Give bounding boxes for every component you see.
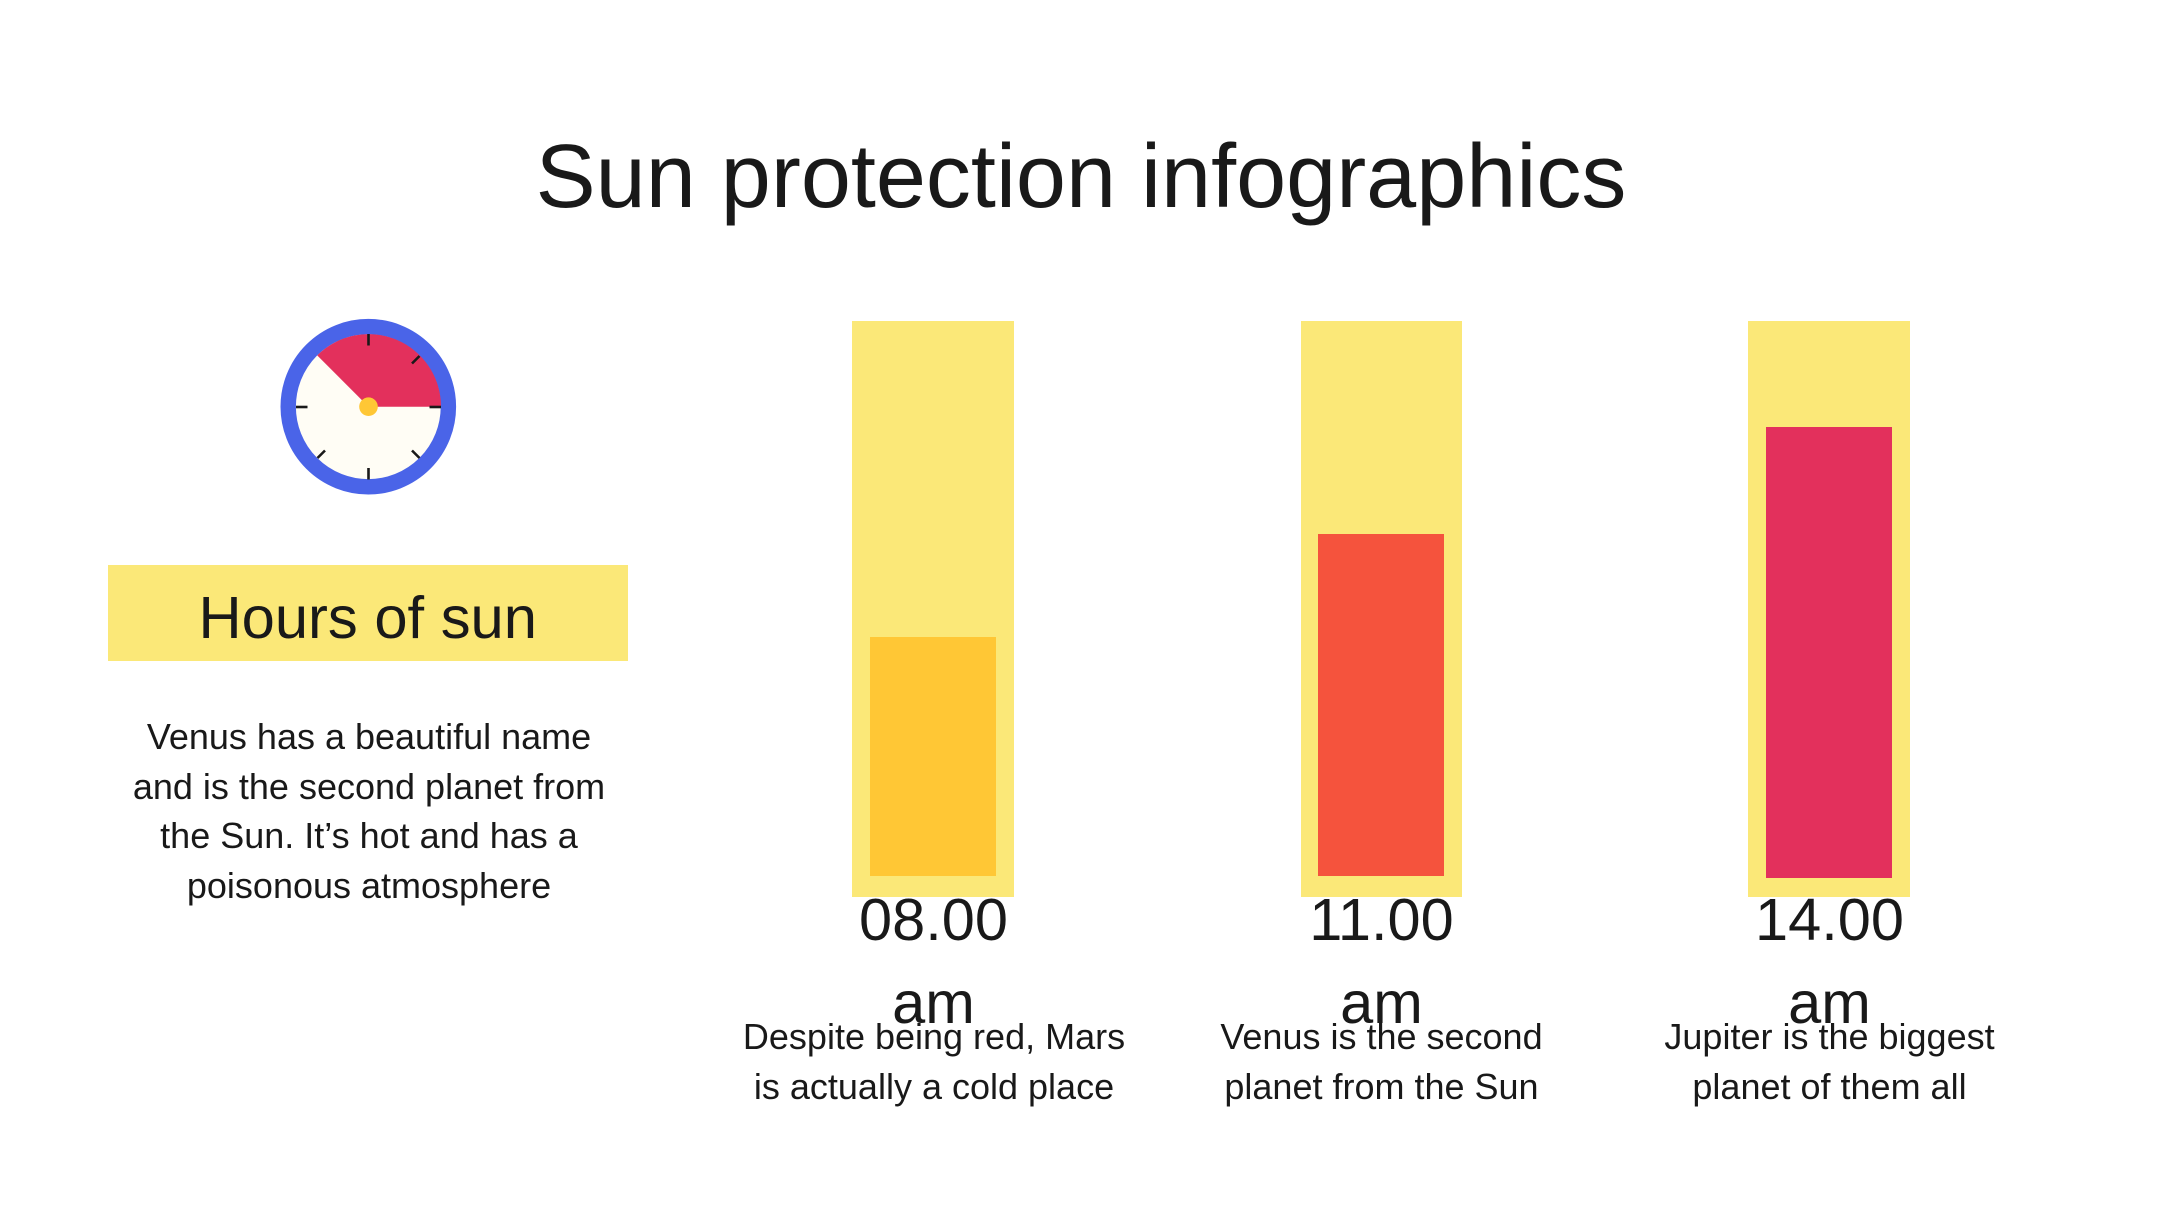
text block: Mars — [743, 1016, 1125, 1107]
text block: Venus — [1220, 1016, 1543, 1107]
bar 2 fill — [1318, 534, 1444, 876]
text block: Venus description: poisonous atmosphere — [187, 865, 551, 906]
text block: Venus description: and is the second planet from — [133, 766, 605, 807]
bar 2 background — [1300, 321, 1462, 897]
text block: Venus description — [133, 716, 605, 906]
label: 08.00 am: am — [892, 969, 975, 1036]
text block: Jupiter: planet of them all — [1692, 1066, 1967, 1107]
label: 14.00 am: 14.00 — [1755, 886, 1904, 953]
text block: Venus description: the Sun. It’s hot and has a — [160, 815, 578, 856]
label: 08.00 am: 08.00 — [859, 886, 1008, 953]
label: 14.00 am: am — [1788, 969, 1871, 1036]
heading band: Hours of sun — [108, 565, 628, 661]
bar 3 background — [1748, 321, 1910, 897]
label: 08.00 am — [859, 886, 1008, 1036]
label: 11.00 am — [1309, 886, 1454, 1036]
bar 1 fill — [870, 636, 996, 876]
text block: Venus: planet from the Sun — [1224, 1066, 1539, 1107]
bar 3 fill — [1766, 427, 1892, 878]
bar 1 background — [852, 321, 1014, 897]
title: Sun protection infographics — [536, 127, 1626, 227]
text block: Jupiter — [1664, 1016, 1995, 1107]
icon: clock — [280, 318, 456, 494]
text block: Venus description: Venus has a beautiful name — [147, 716, 591, 757]
label: 11.00 am: 11.00 — [1309, 886, 1454, 953]
text block: Jupiter: Jupiter is the biggest — [1664, 1016, 1995, 1057]
text block: Mars: Despite being red, Mars — [743, 1016, 1125, 1057]
label: 14.00 am — [1755, 886, 1904, 1036]
label: 11.00 am: am — [1340, 969, 1423, 1036]
text block: Venus: Venus is the second — [1220, 1016, 1543, 1057]
text block: Mars: is actually a cold place — [754, 1066, 1114, 1107]
heading band: Hours of sun: Hours of sun — [199, 584, 537, 651]
